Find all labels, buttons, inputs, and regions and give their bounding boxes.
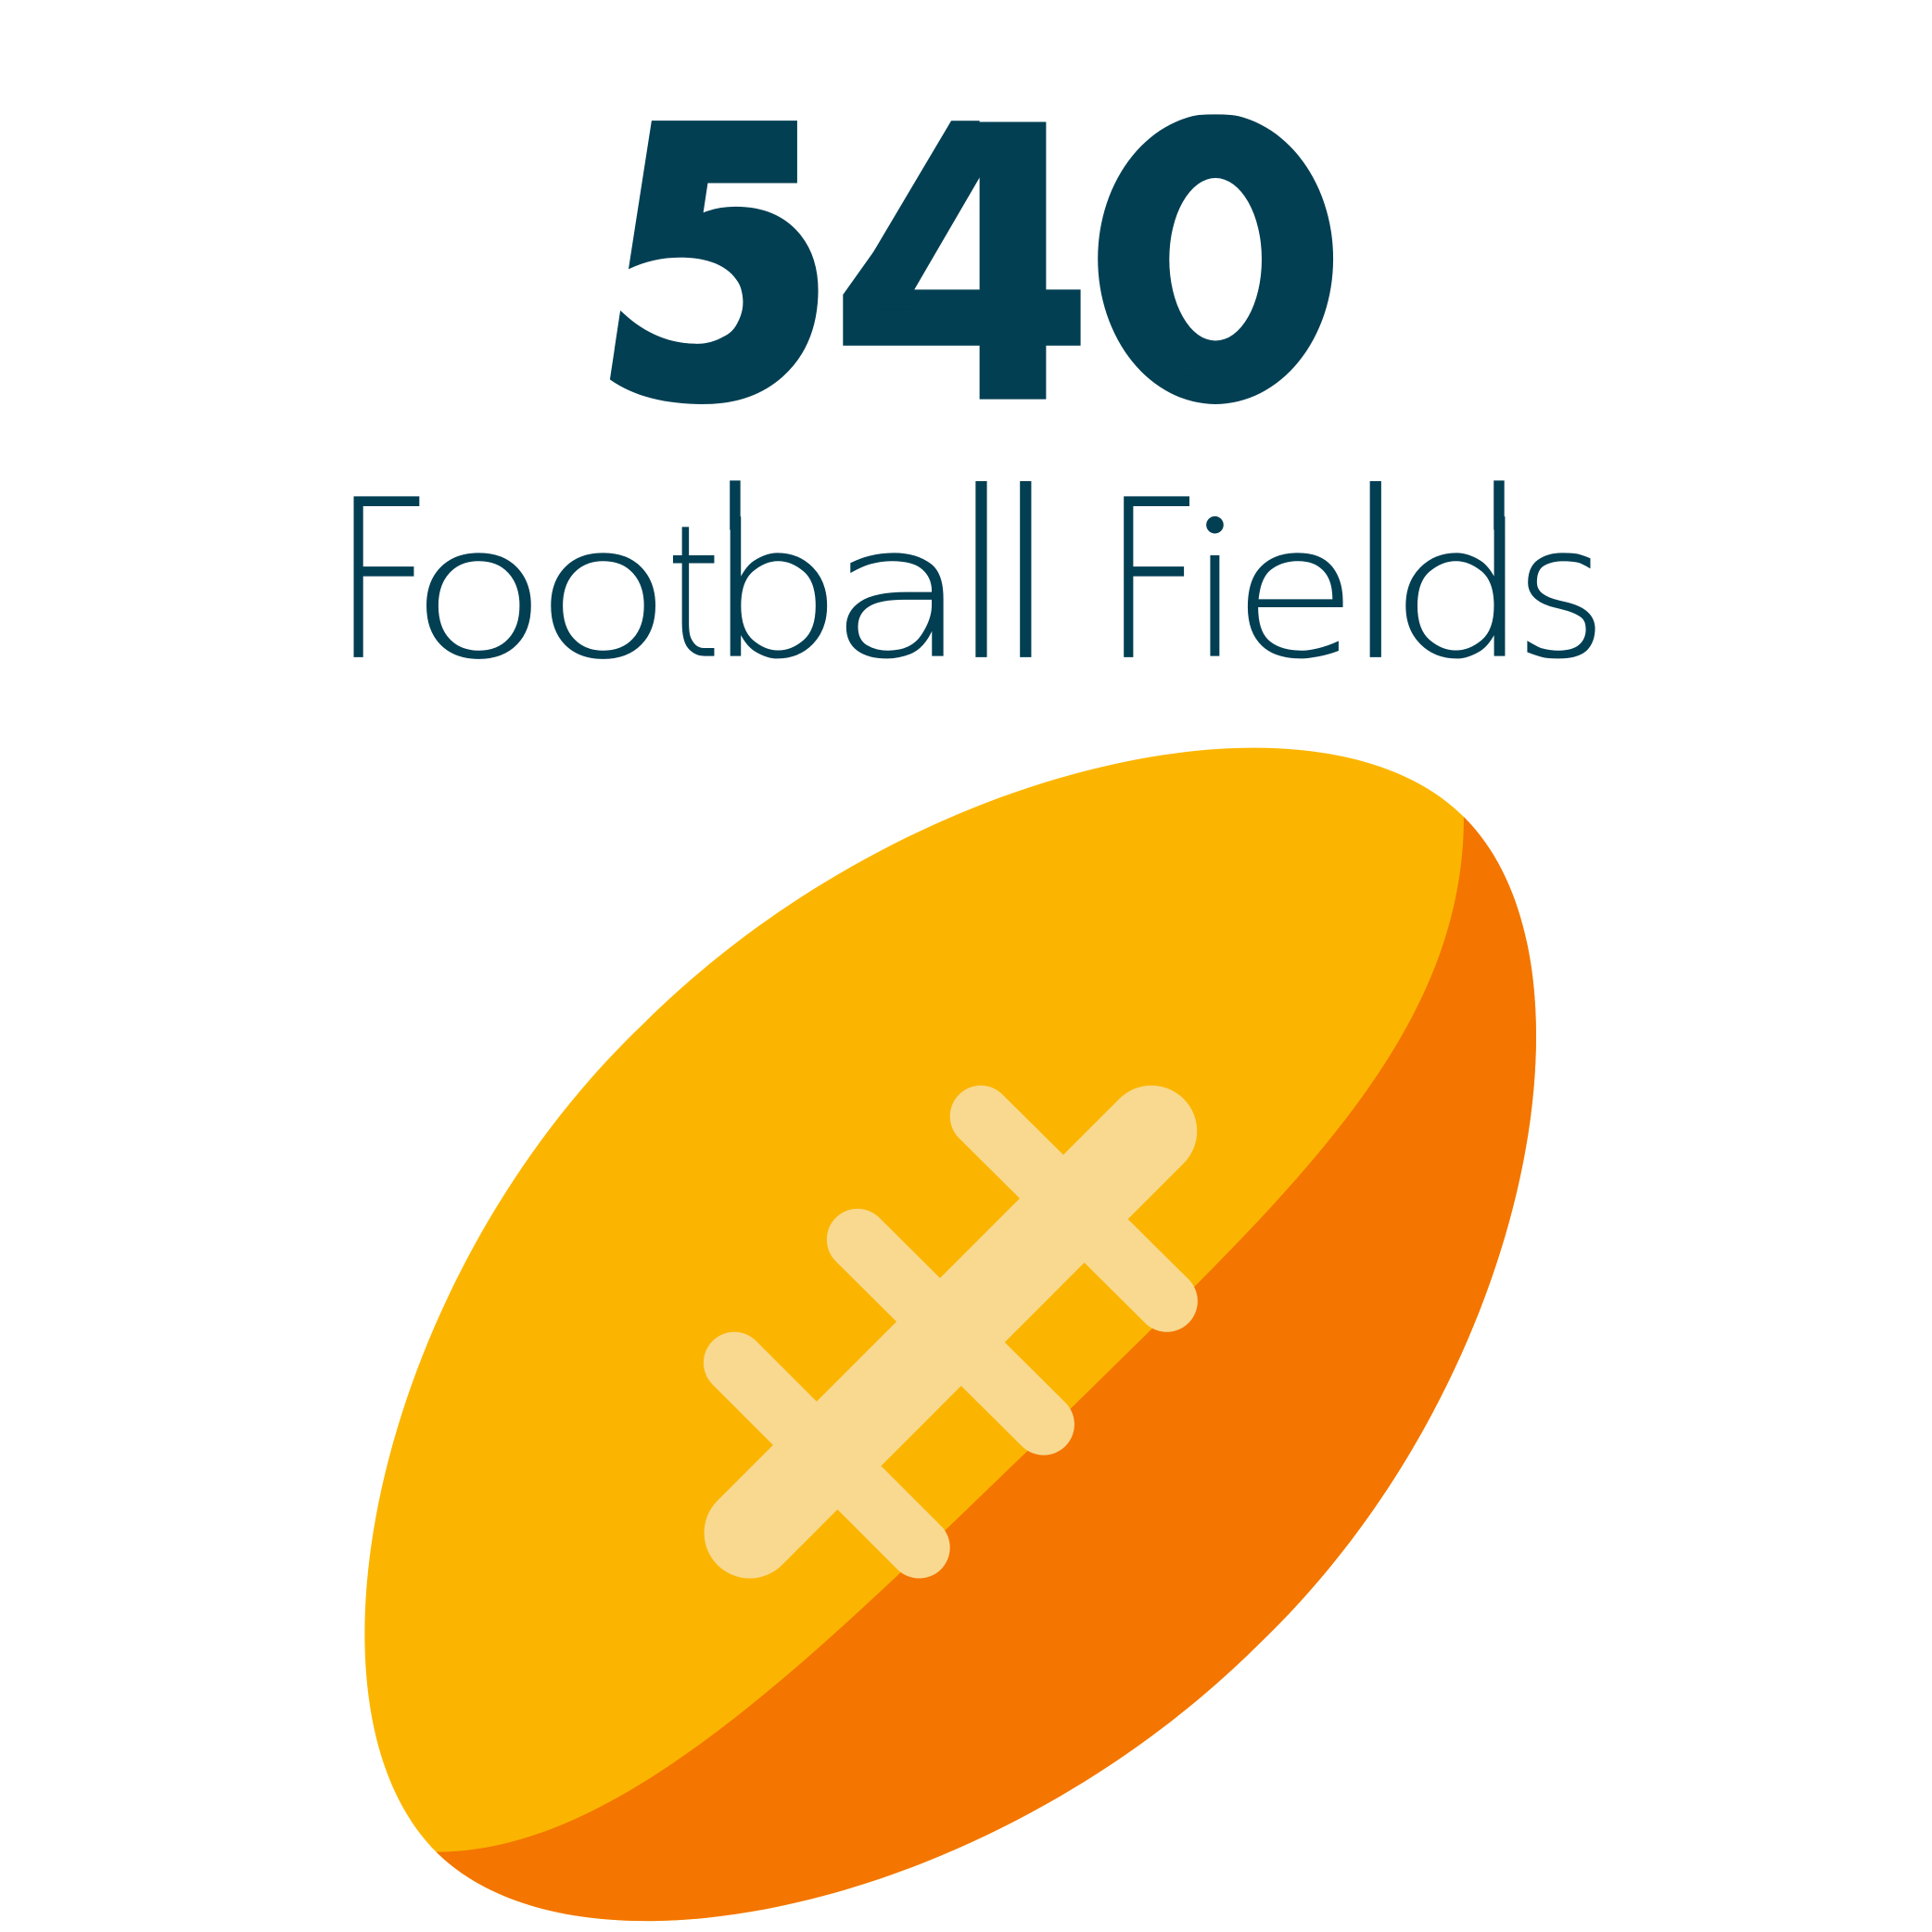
cross stitch 1 bbox=[734, 1363, 919, 1547]
digit 4 diagonal edge bbox=[845, 121, 980, 308]
subtitle: Football Fields: s bbox=[1514, 487, 1607, 699]
subtitle: Football Fields bbox=[333, 121, 1607, 1921]
subtitle: Football Fields: b bbox=[706, 487, 844, 699]
number heading: 540 bbox=[599, 53, 1333, 467]
digit 4 shaping bbox=[833, 108, 1096, 407]
digit 5 tail bbox=[610, 311, 705, 404]
digit 0 counter bbox=[1169, 178, 1262, 340]
laces bbox=[734, 1116, 1167, 1547]
subtitle: Football Fields: F bbox=[333, 452, 434, 708]
number heading: 540: 5 bbox=[599, 53, 837, 467]
subtitle: Football Fields: d bbox=[1389, 487, 1530, 699]
digit 5 shaping bbox=[579, 105, 846, 379]
subtitle: Football Fields: t bbox=[667, 487, 720, 699]
main lace bbox=[750, 1131, 1151, 1532]
ball body: yellow upper side bbox=[364, 748, 1536, 1921]
cross stitch 3 bbox=[981, 1116, 1167, 1302]
subtitle: Football Fields: F bbox=[1103, 452, 1203, 708]
subtitle: Football Fields: l bbox=[1344, 443, 1408, 712]
subtitle: Football Fields: l bbox=[950, 443, 1014, 712]
number heading: 540: 4 bbox=[849, 53, 1074, 467]
dot of i bbox=[1205, 505, 1229, 537]
subtitle: Football Fields: o bbox=[533, 487, 673, 699]
subtitle: Football Fields: o bbox=[409, 487, 549, 699]
subtitle: Football Fields: e bbox=[1232, 487, 1358, 699]
number heading: 540: 0 bbox=[1087, 53, 1342, 467]
cross stitch 2 bbox=[858, 1239, 1044, 1424]
ascender of d bbox=[1493, 480, 1505, 530]
subtitle: Football Fields: l bbox=[995, 443, 1059, 712]
subtitle: Football Fields: i bbox=[1190, 487, 1241, 699]
ball shaded side: orange lower side bbox=[436, 817, 1536, 1921]
subtitle: Football Fields: a bbox=[828, 487, 969, 699]
ascender of b bbox=[730, 480, 741, 530]
